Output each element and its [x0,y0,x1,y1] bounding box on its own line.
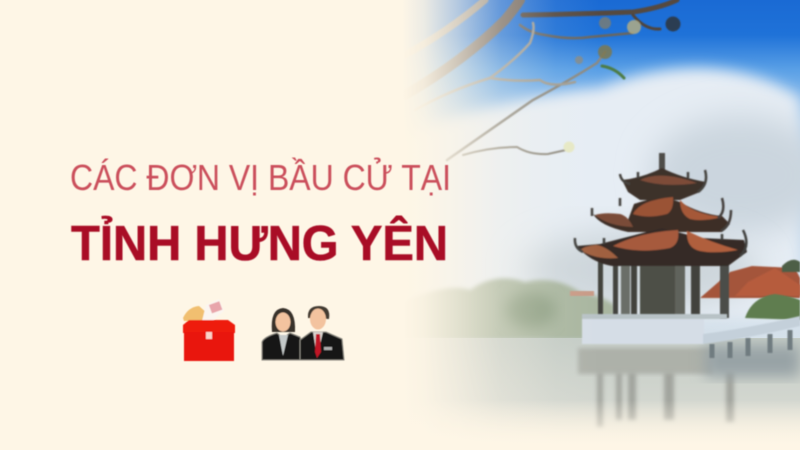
woman face [276,312,290,332]
photo: stone platform and bridge [582,314,800,358]
box latch [206,332,212,339]
photo: tree branches with flowers [405,0,680,160]
pagoda top roof [622,168,706,200]
photo: pagoda [575,153,747,318]
title line 1: CÁC ĐƠN VỊ BẦU CỬ TẠI [70,156,451,198]
box body [184,332,234,361]
photo: sky with clouds [380,0,800,350]
woman hair [272,308,295,332]
ballot hand [183,306,208,321]
pagoda lower roof [577,228,747,266]
photo: water with reflection [385,338,800,450]
photo: background trees and temple building [395,260,800,340]
man hair [308,306,329,319]
pagoda middle roof [593,198,730,232]
bottom fade over photo [380,400,800,450]
man suit [300,332,344,360]
woman suit [262,333,306,360]
pagoda columns [598,258,729,318]
ballot paper [202,299,224,321]
icon: ballot box [183,299,235,361]
woman blouse [279,335,288,356]
left fade over photo [380,0,600,450]
box lid [183,320,235,333]
icon: two delegates [262,306,344,360]
pagoda spire [659,153,665,171]
title line 2: TỈNH HƯNG YÊN [71,216,448,271]
man shirt and tie [313,332,323,358]
man face [310,308,326,330]
